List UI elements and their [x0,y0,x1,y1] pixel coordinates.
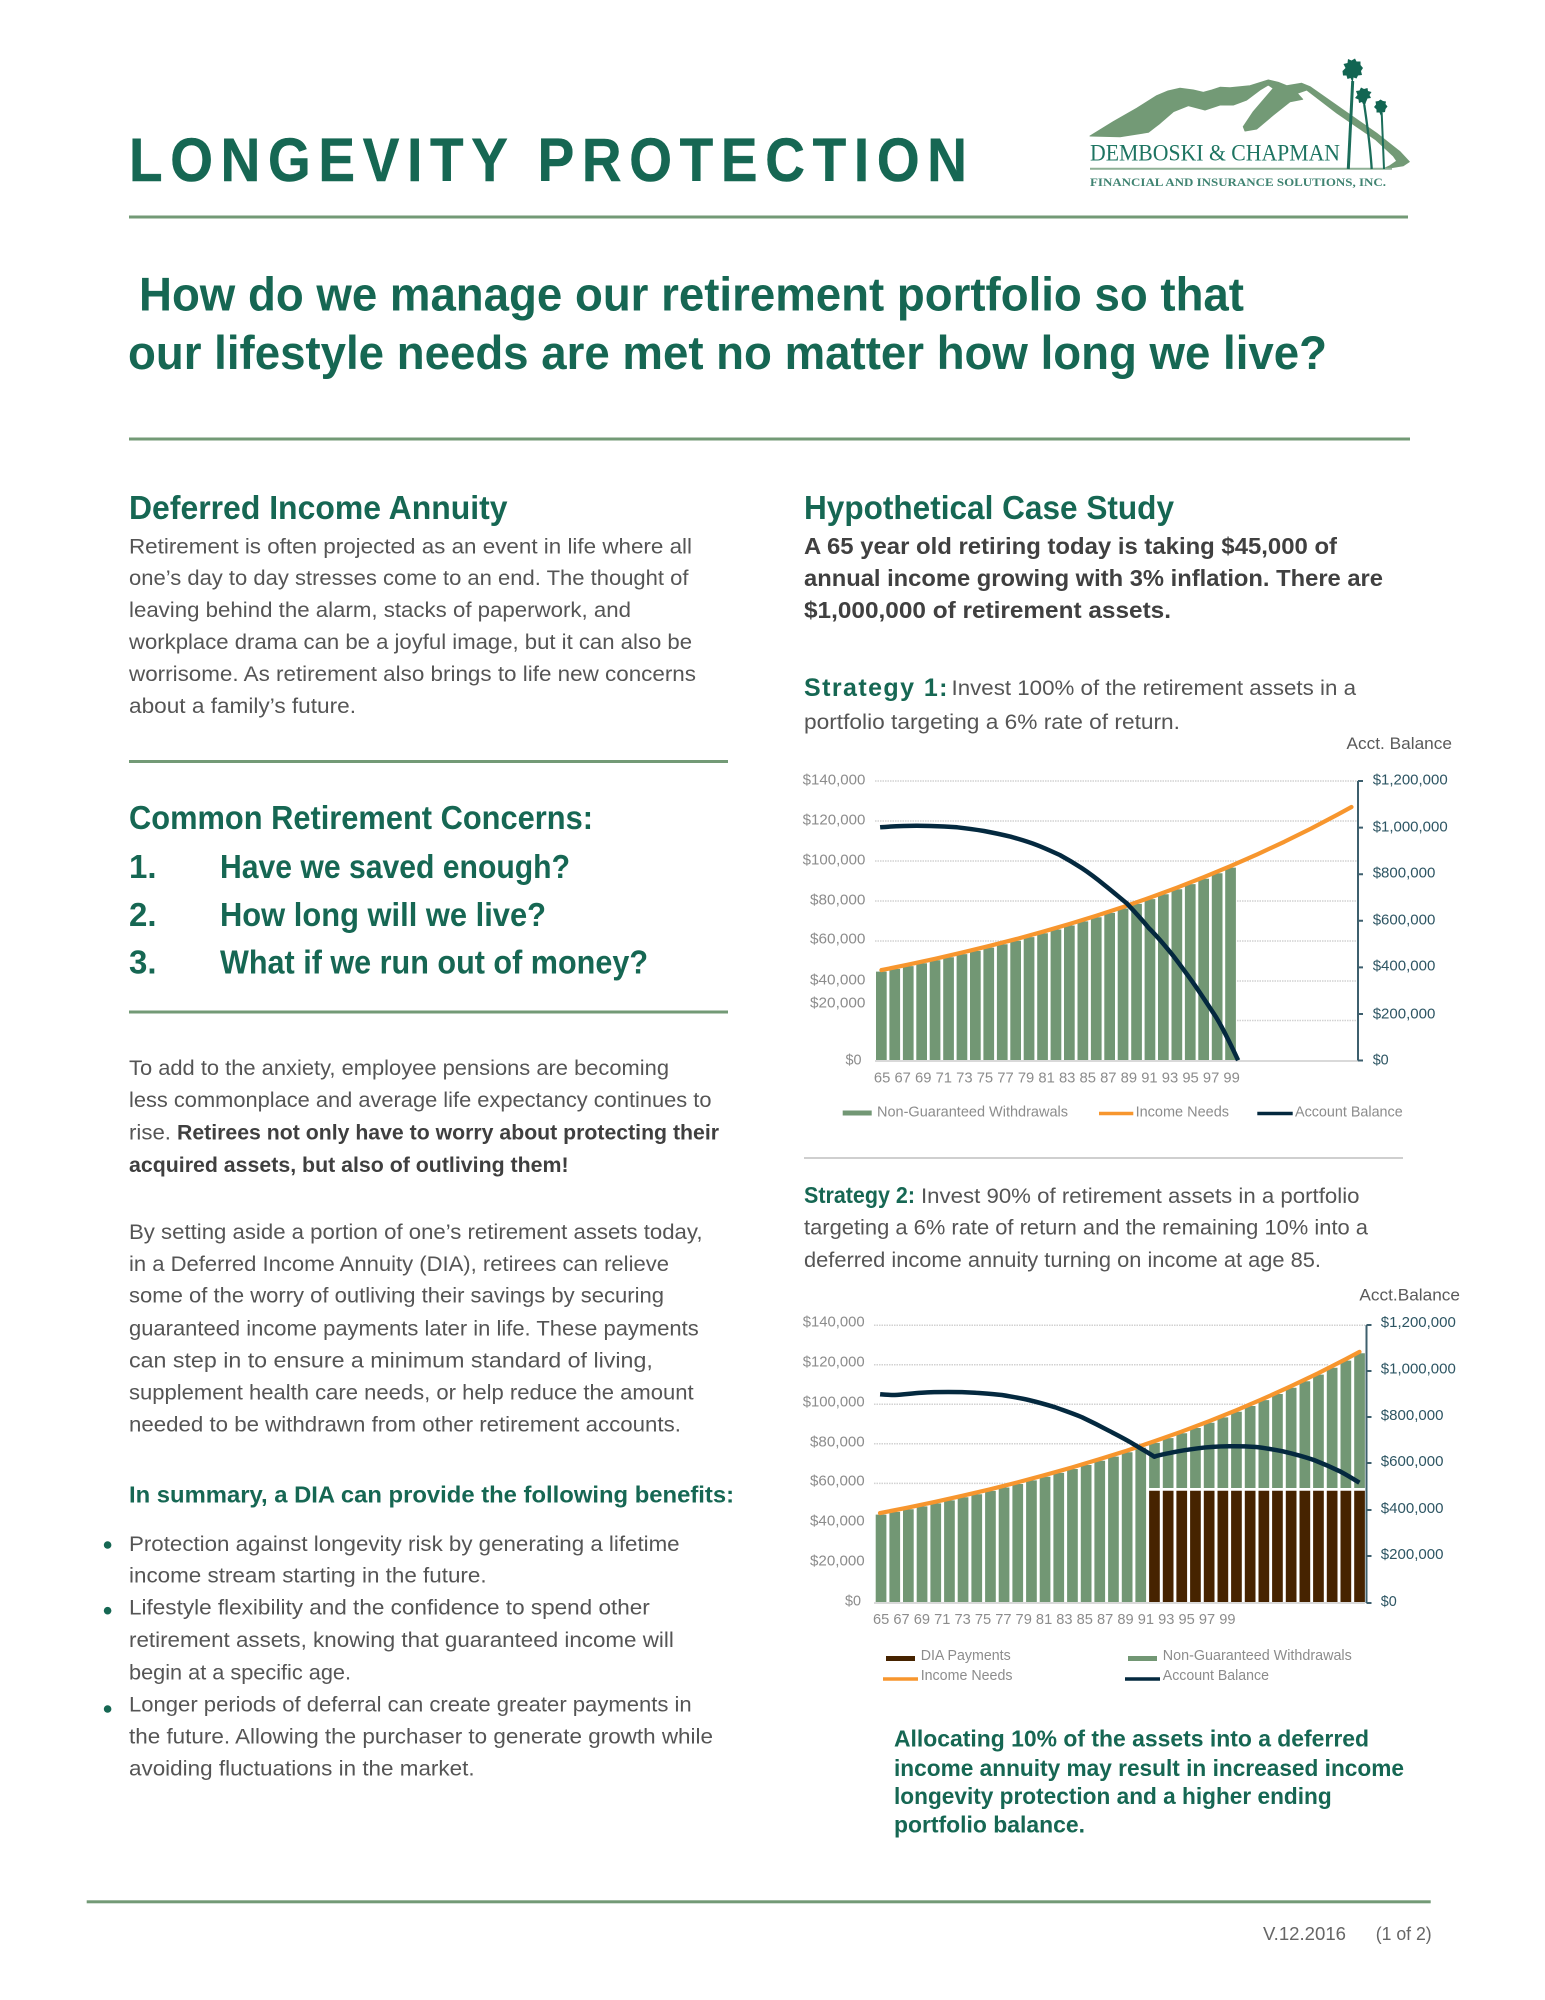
callout: portfolio balance. [894,1812,1085,1838]
icon: mountain [1090,80,1409,169]
line: income needs [880,1352,1360,1513]
list: concerns: 1. [129,848,157,885]
heading: Common Retirement Concerns: Common Retirement Concerns: [129,799,593,836]
legend: Account Balance [1295,1104,1403,1121]
panel: right column [803,489,1460,1838]
left axis labels: $100,000 [803,1394,865,1410]
right axis: $600,000 [1381,1453,1444,1470]
text block: case description: A 65 year old retiring today is taking $45,000 of [804,533,1337,559]
axis title: Acct. Balance [1346,734,1452,753]
right axis: $1,000,000 [1373,818,1448,836]
text block: strategy 2: Invest 90% of retirement assets in a portfolio [921,1185,1360,1208]
right axis: $400,000 [1373,958,1435,974]
right axis: $600,000 [1373,912,1435,928]
text block: case description: annual income growing with 3% inflation. There are [804,565,1383,591]
left axis labels: $60,000 [810,930,865,948]
left axis labels: $0 [846,1052,862,1068]
left axis labels: $40,000 [810,1512,865,1530]
chart: strategy 2 [803,1286,1460,1684]
right axis: $400,000 [1381,1500,1444,1517]
text block: intro: about a family’s future. [129,695,356,718]
text block: anxiety: Retirees not only have to worry about protecting their [177,1122,719,1144]
icon: palm trees [1342,58,1388,169]
text block: strategy 1: Invest 100% of the retirement assets in a [952,677,1356,700]
callout: income annuity may result in increased income [894,1755,1404,1781]
heading: summary: In summary, a DIA can provide the following benefits: [129,1481,734,1507]
list: concerns [129,848,648,980]
left axis labels: $120,000 [803,812,865,828]
text block: anxiety [129,1057,719,1177]
right axis: $0 [1381,1593,1397,1610]
legend: Income Needs [921,1667,1012,1684]
right axis [1366,1314,1456,1610]
logo tagline: FINANCIAL AND INSURANCE SOLUTIONS, INC. [1090,177,1386,189]
text block: intro: workplace drama can be a joyful image, but it can also be [128,631,692,654]
heading: Deferred Income Annuity: Deferred Income Annuity [129,489,508,526]
panel: left column [104,489,734,1781]
callout: longevity protection and a higher ending [894,1783,1332,1809]
x axis labels: 65 67 69 71 73 75 77 79 81 83 85 87 89 91 93 95 97 99 [874,1070,1240,1087]
text block: anxiety: rise. [129,1122,171,1144]
bars: DIA payments [1149,1491,1365,1602]
icon: logo underline [1090,168,1392,170]
bars: non-guaranteed withdrawals [876,1353,1365,1602]
text block: case description: $1,000,000 of retirement assets. [804,597,1171,623]
list: benefits: begin at a specific age. [129,1662,351,1684]
left axis labels: $140,000 [803,772,865,788]
list: benefits: avoiding fluctuations in the market. [129,1758,475,1781]
title: LONGEVITY PROTECTION [129,126,967,195]
text block: intro: Retirement is often projected as an event in life where all [129,536,692,558]
text block: strategy 1: portfolio targeting a 6% rate of return. [804,711,1180,734]
left axis labels: $120,000 [803,1354,865,1370]
list: benefits: income stream starting in the future. [129,1565,487,1588]
text block: strategy 2: Strategy 2: [804,1182,915,1208]
legend: Non-Guaranteed Withdrawals [1163,1647,1352,1664]
left axis labels: $20,000 [810,1552,865,1570]
left axis labels: $60,000 [810,1472,865,1490]
text block: DIA explanation: supplement health care needs, or help reduce the amount [129,1382,694,1404]
text block: anxiety: To add to the anxiety, employee pensions are becoming [129,1057,669,1080]
list: benefits: Protection against longevity risk by generating a lifetime [129,1533,680,1556]
callout: Allocating 10% of the assets into a deferred [894,1726,1369,1752]
legend: DIA Payments [921,1647,1011,1664]
logo [1090,58,1409,189]
left axis labels: $80,000 [810,892,865,908]
legend: Income Needs [1136,1104,1229,1121]
logo name: DEMBOSKI & CHAPMAN [1090,141,1340,166]
text block: strategy 2: deferred income annuity turning on income at age 85. [804,1249,1321,1272]
chart: strategy 1 [803,734,1452,1121]
text block: DIA explanation: some of the worry of outliving their savings by securing [129,1284,664,1308]
text block: strategy 2 [804,1182,1368,1272]
text block: DIA explanation: By setting aside a portion of one’s retirement assets today, [129,1221,702,1244]
right axis [1358,772,1448,1068]
line: income needs [881,807,1352,970]
list: concerns: What if we run out of money? [220,944,648,980]
text block: DIA explanation: guaranteed income payments later in life. These payments [129,1318,699,1340]
footer [1263,1924,1432,1944]
text block: anxiety: less commonplace and average life expectancy continues to [129,1089,712,1112]
x axis labels: 65 67 69 71 73 75 77 79 81 83 85 87 89 91 93 95 97 99 [873,1611,1236,1628]
text block: strategy 1: Strategy 1: [804,674,948,702]
list: concerns: 3. [129,944,157,980]
callout [894,1726,1404,1838]
right axis: $800,000 [1381,1407,1444,1424]
headline: How do we manage our retirement portfolio so that [139,268,1244,320]
text block: anxiety: acquired assets, but also of outliving them! [129,1154,569,1177]
text block: DIA explanation [129,1221,702,1436]
left axis labels: $100,000 [803,852,865,868]
bars: non-guaranteed withdrawals [876,868,1236,1060]
left axis labels: $0 [845,1592,861,1610]
heading: Hypothetical Case Study: Hypothetical Case Study [804,489,1175,526]
right axis: $0 [1373,1052,1389,1068]
left axis labels: $80,000 [810,1434,865,1450]
text block: intro [128,536,696,718]
list: concerns: How long will we live? [220,896,546,933]
list: benefits: Longer periods of deferral can create greater payments in [129,1694,692,1717]
footer: V.12.2016 [1263,1924,1346,1944]
left axis labels: $40,000 [810,972,865,988]
text block: DIA explanation: can step in to ensure a minimum standard of living, [129,1350,653,1372]
axis title: Acct.Balance [1359,1286,1460,1305]
legend [843,1104,1403,1121]
left axis labels: $20,000 [810,994,865,1012]
list: concerns: Have we saved enough? [220,848,570,885]
right axis: $200,000 [1381,1546,1444,1563]
text block: strategy 2: targeting a 6% rate of return and the remaining 10% into a [804,1216,1368,1240]
text block: case description [804,533,1383,623]
headline [128,268,1327,379]
right axis: $800,000 [1373,864,1435,882]
list: benefits: retirement assets, knowing that guaranteed income will [129,1629,674,1652]
left axis labels: $140,000 [803,1314,865,1330]
text block: intro: worrisome. As retirement also brings to life new concerns [128,663,696,686]
legend: Non-Guaranteed Withdrawals [877,1104,1068,1121]
headline: our lifestyle needs are met no matter how long we live? [128,326,1327,379]
list: concerns: 2. [129,896,157,933]
right axis: $1,200,000 [1373,772,1448,788]
right axis: $1,000,000 [1381,1360,1456,1378]
text block: DIA explanation: needed to be withdrawn from other retirement accounts. [129,1414,681,1436]
right axis: $200,000 [1373,1006,1435,1022]
text block: intro: leaving behind the alarm, stacks of paperwork, and [129,599,631,622]
legend [883,1647,1352,1684]
list: benefits: the future. Allowing the purchaser to generate growth while [129,1726,713,1749]
text block: DIA explanation: in a Deferred Income Annuity (DIA), retirees can relieve [129,1253,669,1276]
list: benefits [104,1533,713,1781]
legend: Account Balance [1163,1667,1269,1684]
right axis: $1,200,000 [1381,1314,1456,1331]
left axis labels [803,1314,865,1610]
footer: (1 of 2) [1376,1924,1432,1944]
left axis labels [803,772,865,1068]
list: benefits: Lifestyle flexibility and the confidence to spend other [129,1597,650,1620]
line: account balance [880,1392,1359,1483]
text block: strategy 1 [804,674,1356,734]
line: account balance [880,826,1238,1060]
text block: intro: one’s day to day stresses come to an end. The thought of [129,567,689,590]
